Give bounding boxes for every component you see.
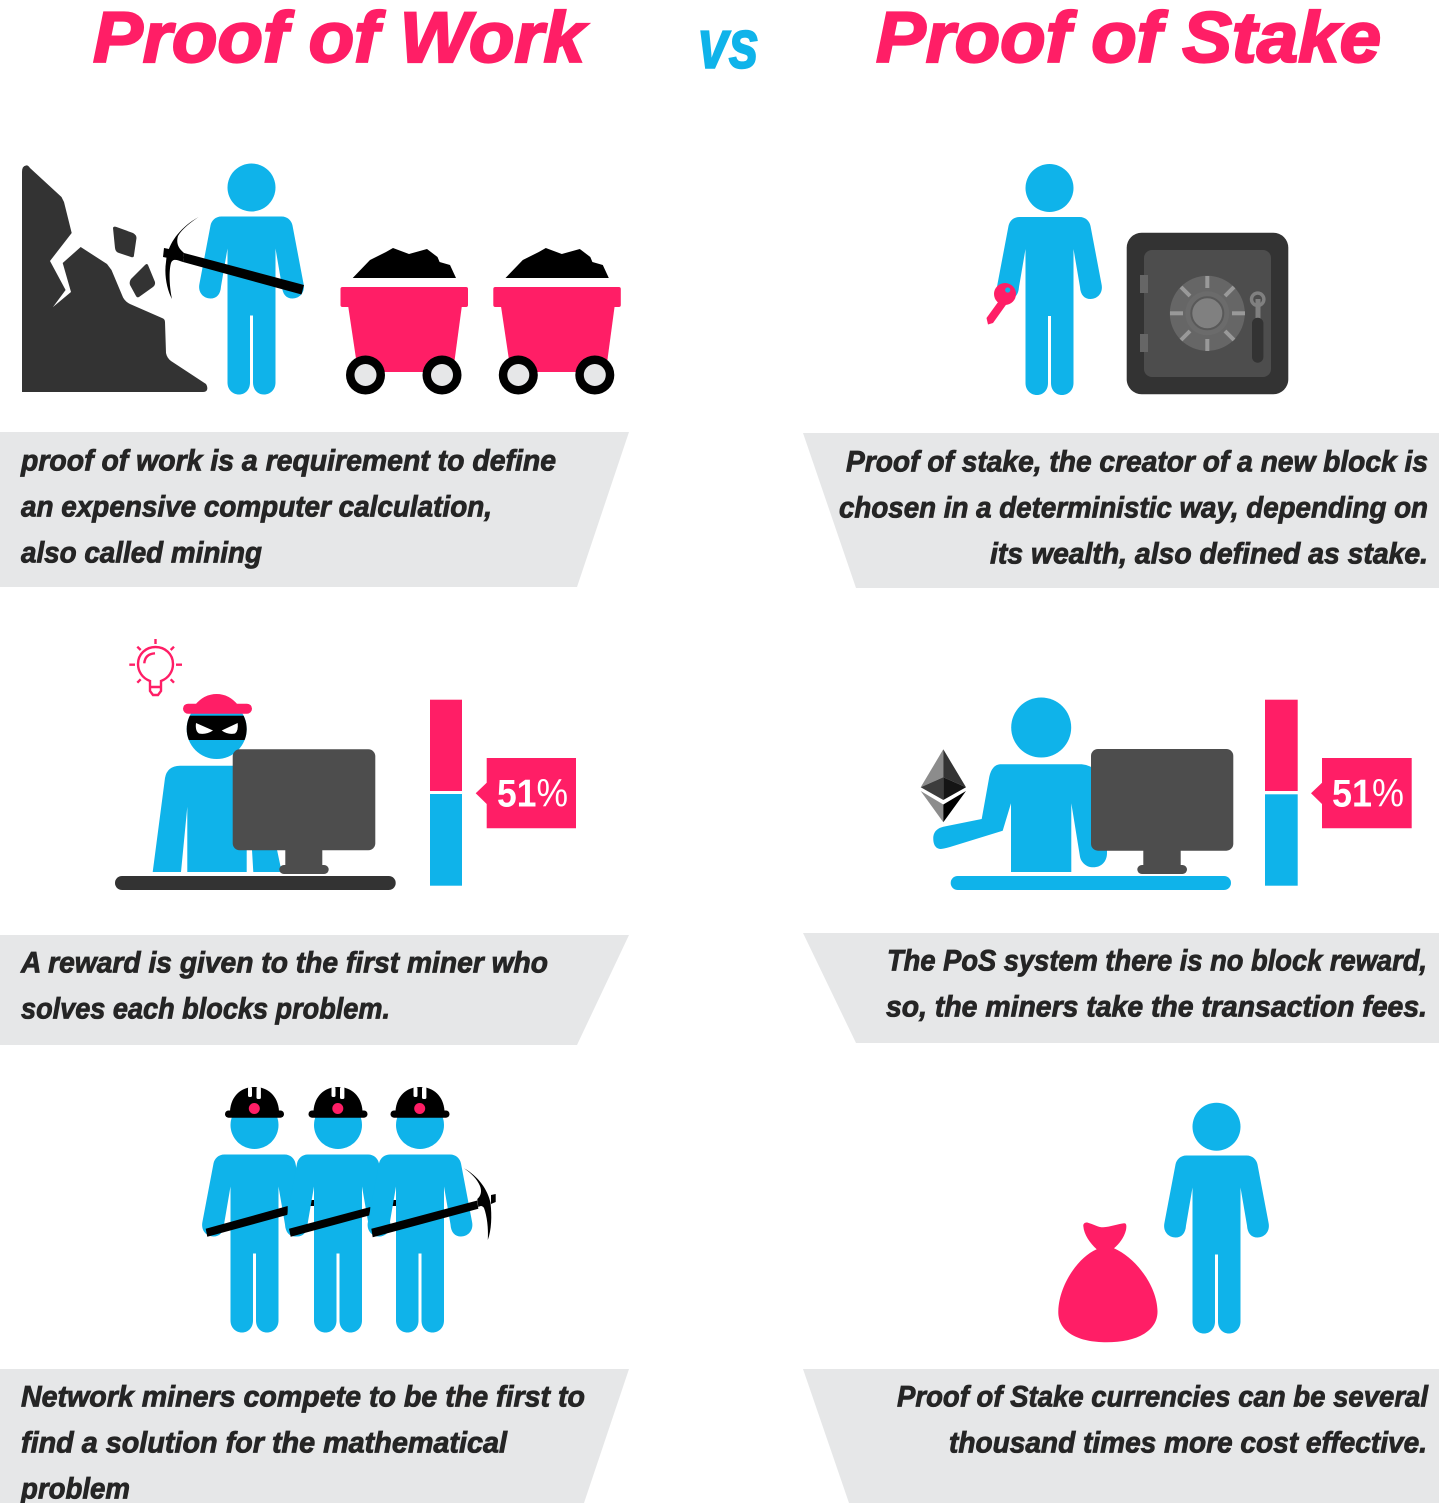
icon: monitor: [233, 749, 375, 874]
illustration: staker at computer with ether: [921, 698, 1412, 890]
icon: ethereum diamond: [921, 749, 966, 822]
icon: person: [997, 164, 1102, 395]
text: definition lines: proof of work is a requirement to define: [20, 444, 556, 478]
bar chart: 51 percent left: [430, 700, 462, 886]
text: competition lines: Network miners compete to be the first to: [21, 1380, 585, 1414]
callout: 51 percent right: 51%: [1332, 773, 1404, 816]
callout: 51 percent left: [476, 758, 576, 828]
callout: 51 percent right: [1311, 758, 1412, 828]
icon: red hat: [183, 694, 252, 714]
icon: pickaxe: [163, 217, 304, 299]
icon: light bulb: [129, 639, 182, 695]
panel: proof of stake definition: [803, 433, 1439, 588]
icon: safe: [1127, 233, 1288, 394]
title: Proof of Stake: Proof of Stake: [876, 0, 1381, 78]
text: definition lines: also called mining: [21, 536, 262, 570]
icon: monitor: [1091, 749, 1233, 874]
panel: proof of work definition: [0, 432, 629, 587]
illustration: person with money bag: [1058, 1103, 1269, 1342]
icon: rock face: [22, 165, 207, 392]
text: reward lines: solves each blocks problem.: [21, 992, 390, 1026]
panel: proof of work competition: [0, 1369, 629, 1503]
text: reward lines: [20, 946, 548, 1026]
icon: desk: [951, 876, 1231, 890]
illustration: miner at rock with carts: [22, 164, 621, 394]
panel: proof of work reward: [0, 935, 629, 1045]
icon: mine cart one: [340, 248, 468, 394]
panel: proof of stake fees: [803, 933, 1439, 1043]
text: definition lines: [20, 444, 556, 570]
title: vs: vs: [698, 5, 759, 83]
text: reward lines: A reward is given to the first miner who: [20, 946, 548, 980]
text: competition lines: find a solution for the mathematical: [21, 1426, 508, 1460]
icon: head with mask: [186, 714, 247, 759]
bar chart: 51 percent right: [1265, 700, 1298, 886]
panel: proof of stake cost: [803, 1369, 1439, 1503]
icon: person at desk: [933, 698, 1107, 872]
icon: miner figure: [199, 164, 304, 394]
text: definition lines: an expensive computer calculation,: [21, 490, 492, 524]
illustration: three competing miners: [202, 1087, 496, 1332]
text: fee lines: [886, 944, 1427, 1024]
illustration: person with key and safe: [986, 164, 1288, 395]
icon: person: [1164, 1103, 1269, 1334]
icon: miner three with pickaxe: [368, 1087, 496, 1332]
icon: miner one: [202, 1087, 307, 1332]
text: definition lines: [839, 446, 1428, 570]
illustration: masked miner at computer: [115, 639, 576, 890]
icon: key: [986, 283, 1016, 324]
text: competition lines: [20, 1380, 585, 1503]
title: Proof of Work: Proof of Work: [93, 0, 589, 78]
callout: 51 percent left: 51%: [497, 773, 568, 816]
icon: money bag: [1058, 1222, 1158, 1342]
icon: miner two: [286, 1087, 390, 1332]
icon: mine cart two: [493, 248, 621, 394]
text: cost lines: [897, 1380, 1429, 1460]
icon: body: [153, 766, 282, 872]
icon: desk: [115, 876, 396, 890]
